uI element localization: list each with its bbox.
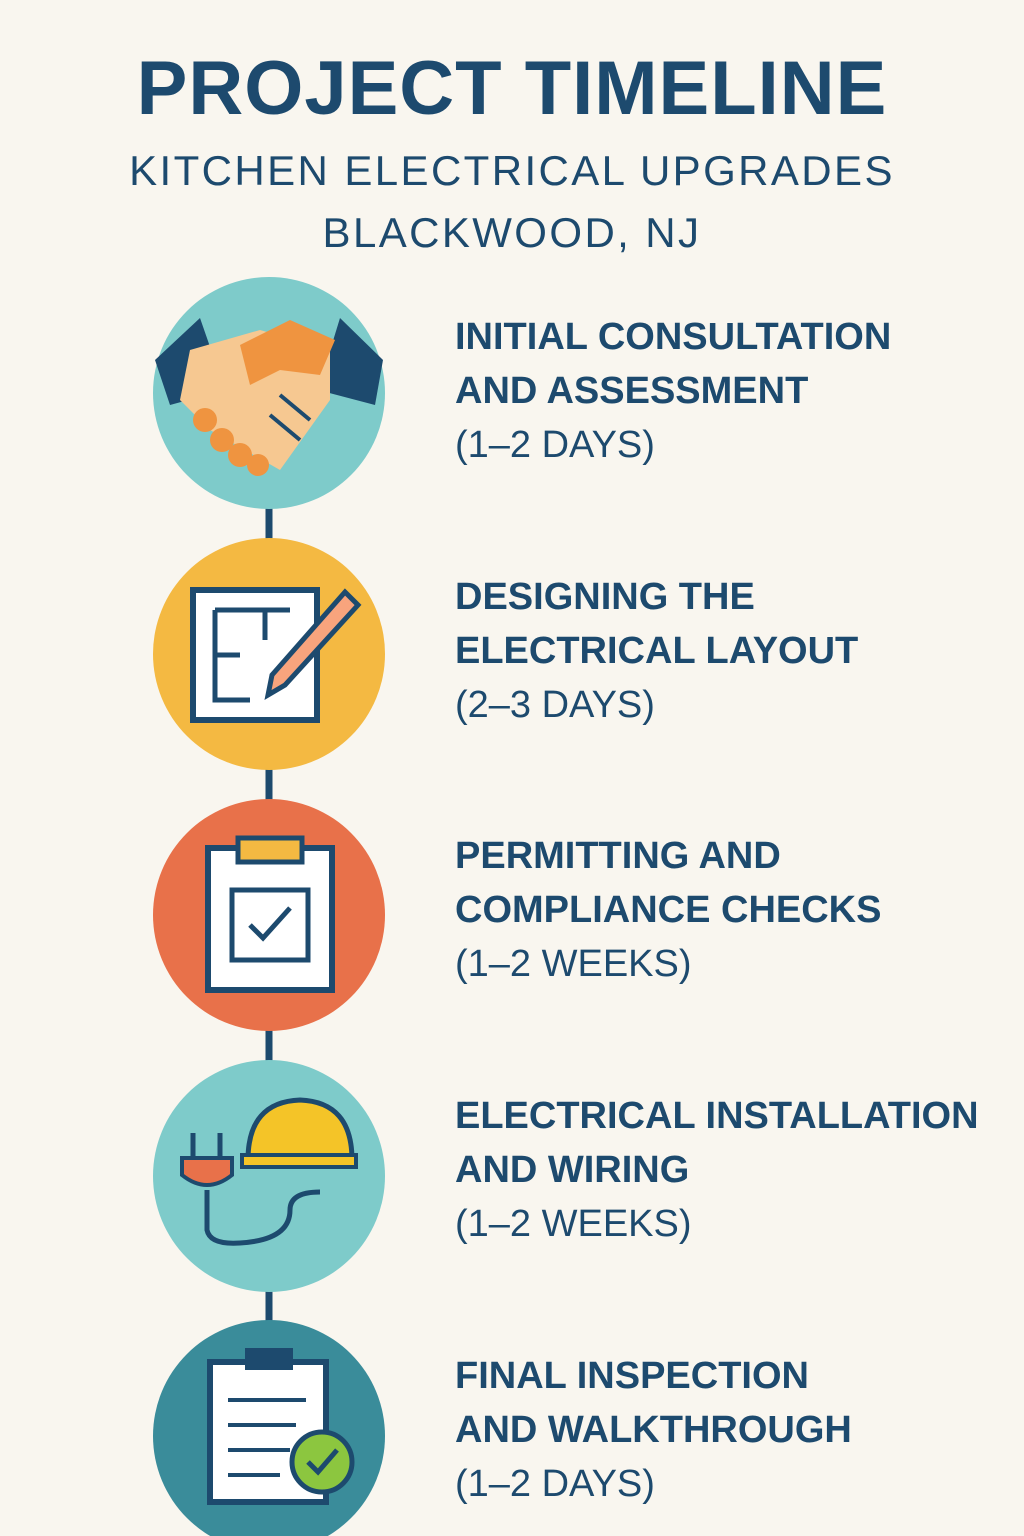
step 2 text — [455, 576, 858, 726]
step 1 text: AND ASSESSMENT — [455, 370, 808, 412]
step 3 text: PERMITTING AND — [455, 835, 781, 877]
step 4 text: (1–2 WEEKS) — [455, 1203, 692, 1245]
step 4 text: AND WIRING — [455, 1149, 689, 1191]
step 1 text: INITIAL CONSULTATION — [455, 316, 891, 358]
icon: checklist — [153, 1320, 385, 1536]
step 1 text: (1–2 DAYS) — [455, 424, 655, 466]
subtitle — [129, 147, 895, 256]
step 5 text: FINAL INSPECTION — [455, 1355, 809, 1397]
step 5 text — [455, 1355, 852, 1505]
icon: clipboard check — [153, 799, 385, 1031]
icon: handshake — [153, 277, 385, 509]
step 4 text — [455, 1095, 979, 1245]
step 5 text: AND WALKTHROUGH — [455, 1409, 852, 1451]
step 5 text: (1–2 DAYS) — [455, 1463, 655, 1505]
subtitle: KITCHEN ELECTRICAL UPGRADES — [129, 147, 895, 194]
step 3 text: (1–2 WEEKS) — [455, 943, 692, 985]
icon: plug and hard hat — [153, 1060, 385, 1292]
step 2 text: (2–3 DAYS) — [455, 684, 655, 726]
title: PROJECT TIMELINE — [137, 46, 887, 131]
step 2 text: ELECTRICAL LAYOUT — [455, 630, 858, 672]
subtitle: BLACKWOOD, NJ — [323, 209, 701, 256]
step 3 text: COMPLIANCE CHECKS — [455, 889, 881, 931]
icon: layout drawing — [153, 538, 385, 770]
step 2 text: DESIGNING THE — [455, 576, 755, 618]
step 4 text: ELECTRICAL INSTALLATION — [455, 1095, 979, 1137]
step 3 text — [455, 835, 881, 985]
step 1 text — [455, 316, 891, 466]
